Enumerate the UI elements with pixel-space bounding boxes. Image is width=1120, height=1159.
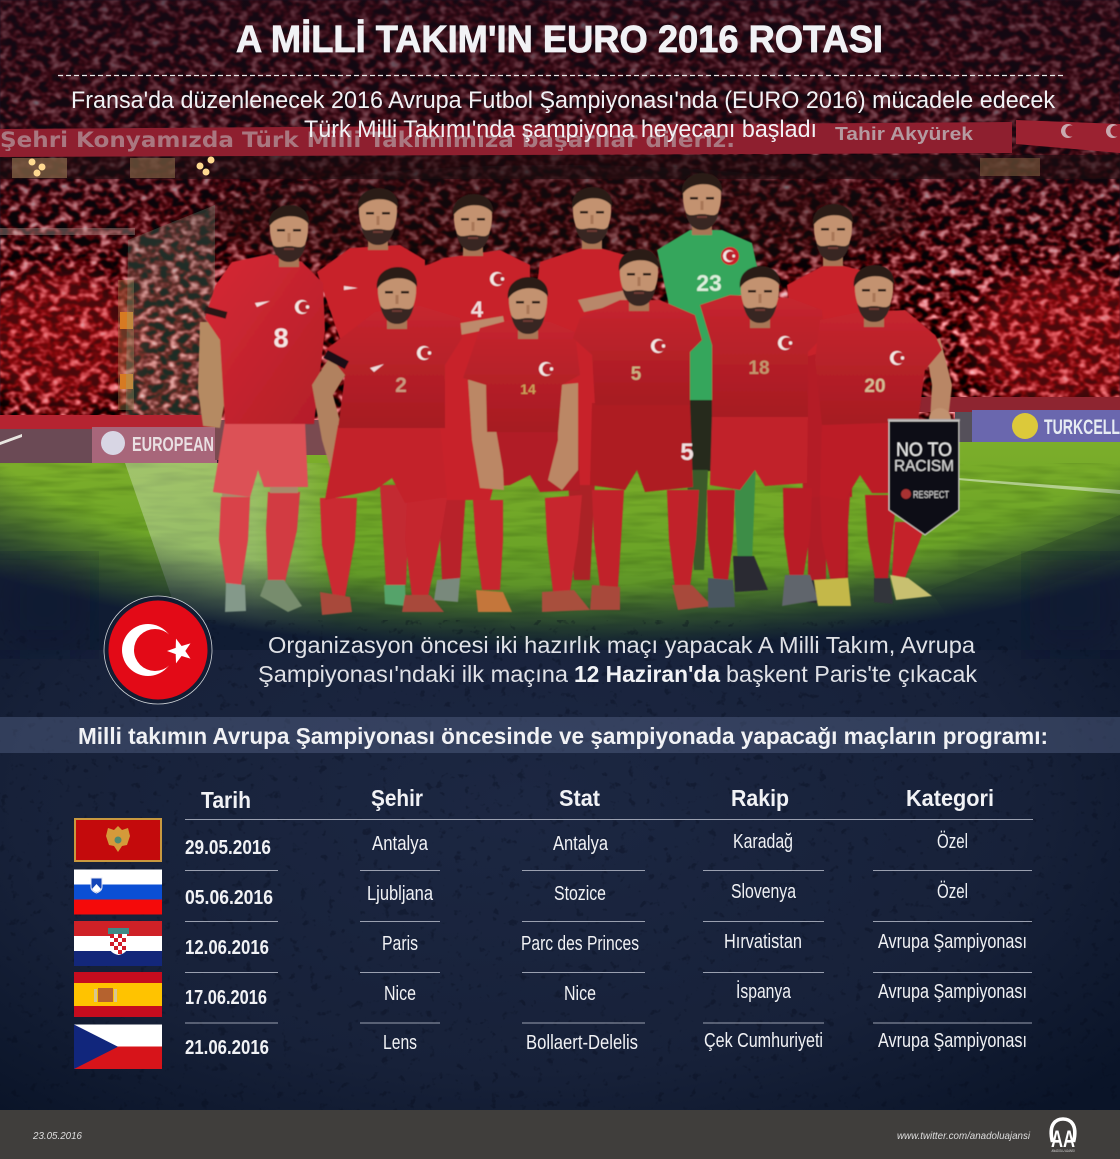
row 4: Spain bbox=[185, 980, 1027, 1009]
player 20: 20 bbox=[864, 376, 886, 397]
subtitle bbox=[71, 87, 1056, 143]
banner in stands: Tahir Akyürek bbox=[835, 124, 974, 144]
football pitch bbox=[0, 442, 1120, 653]
flag: Spain bbox=[74, 972, 162, 1017]
player 14: 14 bbox=[520, 381, 536, 397]
row 5: Czech Republic: Lens bbox=[383, 1032, 417, 1054]
banner in stands bbox=[0, 120, 1120, 157]
row 2: Slovenia: Özel bbox=[937, 881, 968, 903]
player 5: 5 bbox=[680, 439, 694, 466]
advertising boards: EUROPEAN bbox=[132, 434, 214, 456]
subtitle: Fransa'da düzenlenecek 2016 Avrupa Futbol Şampiyonası'nda (EURO 2016) mücadele edecek bbox=[71, 87, 1056, 114]
table header: Kategori bbox=[906, 785, 994, 811]
flag: Croatia bbox=[74, 921, 162, 966]
row 5: Czech Republic: Bollaert-Delelis bbox=[526, 1032, 638, 1054]
flag: Montenegro bbox=[74, 818, 162, 862]
intro paragraph: başkent Paris'te çıkacak bbox=[726, 661, 977, 687]
row 2: Slovenia bbox=[185, 881, 968, 909]
row 4: Spain: Nice bbox=[564, 983, 596, 1005]
flag: Czech Republic bbox=[74, 1024, 162, 1069]
icon: Turkish flag circle bbox=[104, 596, 212, 704]
row 1: Montenegro: Karadağ bbox=[733, 831, 793, 853]
banner in stands: Şehri Konyamızda Türk Milli Takımımıza başarılar dileriz. bbox=[0, 128, 735, 152]
row 5: Czech Republic: Çek Cumhuriyeti bbox=[704, 1030, 823, 1052]
row 4: Spain: Nice bbox=[384, 983, 416, 1005]
player 2 bbox=[312, 267, 505, 615]
pennant: no to racism: RESPECT bbox=[913, 490, 949, 501]
logo: Anadolu Agency: ANADOLU AJANSI bbox=[1052, 1149, 1075, 1153]
row 3: Croatia: Parc des Princes bbox=[521, 933, 639, 955]
stadium crowd background bbox=[0, 0, 1120, 462]
player 5 bbox=[573, 249, 712, 610]
player 2: 2 bbox=[395, 374, 407, 397]
player 8: 8 bbox=[273, 323, 289, 353]
logo: Anadolu Agency bbox=[1051, 1119, 1075, 1153]
table header: Tarih bbox=[201, 787, 251, 813]
intro paragraph: Organizasyon öncesi iki hazırlık maçı yapacak A Milli Takım, Avrupa bbox=[268, 632, 975, 658]
intro paragraph: Şampiyonası'ndaki ilk maçına bbox=[258, 661, 568, 687]
row 2: Slovenia: 05.06.2016 bbox=[185, 887, 273, 909]
date: 23.05.2016 bbox=[32, 1131, 82, 1142]
row 2: Slovenia: Stozice bbox=[554, 883, 606, 905]
player 18: 18 bbox=[748, 358, 770, 379]
twitter url: www.twitter.com/anadoluajansi bbox=[897, 1130, 1031, 1142]
row 3: Croatia bbox=[185, 931, 1027, 959]
player 20 bbox=[814, 265, 952, 606]
player: back row 4 bbox=[420, 194, 530, 602]
row 1: Montenegro: Antalya bbox=[553, 833, 609, 855]
player: back row 5th bbox=[535, 187, 635, 580]
team photo bbox=[198, 173, 960, 615]
table header: Rakip bbox=[731, 785, 789, 811]
player 5: 5 bbox=[631, 364, 642, 385]
logo: Anadolu Agency: AA bbox=[1051, 1126, 1075, 1153]
pennant: no to racism: RACISM bbox=[894, 458, 954, 475]
player 14 bbox=[463, 277, 590, 612]
subtitle: Türk Milli Takımı'nda şampiyona heyecanı başladı bbox=[304, 116, 817, 143]
row 4: Spain: Avrupa Şampiyonası bbox=[878, 981, 1027, 1003]
schedule heading band: Milli takımın Avrupa Şampiyonası öncesinde ve şampiyonada yapacağı maçların programı: bbox=[78, 723, 1048, 749]
player: back row goalkeeper 23 bbox=[657, 173, 768, 592]
row 4: Spain: İspanya bbox=[736, 980, 792, 1003]
row 1: Montenegro: Özel bbox=[937, 831, 968, 853]
match schedule table bbox=[185, 785, 1033, 1059]
player: back row 4: 4 bbox=[471, 297, 484, 322]
table header bbox=[201, 785, 994, 813]
row 2: Slovenia: Slovenya bbox=[731, 881, 797, 903]
table header: Stat bbox=[559, 785, 600, 811]
row 1: Montenegro: 29.05.2016 bbox=[185, 837, 271, 859]
row 5: Czech Republic bbox=[185, 1030, 1027, 1059]
pennant: no to racism bbox=[888, 419, 960, 535]
intro paragraph: 12 Haziran'da bbox=[574, 661, 720, 687]
row 4: Spain: 17.06.2016 bbox=[185, 987, 267, 1009]
player: back row right bbox=[787, 204, 865, 604]
title: A MİLLİ TAKIM'IN EURO 2016 ROTASI bbox=[236, 19, 883, 61]
row 3: Croatia: Paris bbox=[382, 933, 418, 955]
advertising boards bbox=[0, 397, 1120, 463]
table header: Şehir bbox=[371, 785, 423, 811]
row 3: Croatia: Hırvatistan bbox=[724, 931, 802, 953]
flag: Slovenia bbox=[74, 870, 162, 914]
footer bar bbox=[0, 1110, 1120, 1159]
player: back row left 2 bbox=[317, 188, 425, 606]
row 5: Czech Republic: Avrupa Şampiyonası bbox=[878, 1030, 1027, 1052]
player: back row goalkeeper 23: 23 bbox=[696, 270, 722, 296]
dashed divider bbox=[58, 74, 1063, 76]
player 18 bbox=[700, 266, 825, 608]
row 5: Czech Republic: 21.06.2016 bbox=[185, 1037, 269, 1059]
schedule heading band bbox=[0, 717, 1120, 753]
intro paragraph bbox=[258, 632, 977, 687]
row 3: Croatia: Avrupa Şampiyonası bbox=[878, 931, 1027, 953]
row 3: Croatia: 12.06.2016 bbox=[185, 937, 269, 959]
row 1: Montenegro bbox=[185, 831, 968, 859]
table rules bbox=[185, 820, 1033, 1023]
row 2: Slovenia: Ljubljana bbox=[367, 883, 434, 905]
lower navy textured background bbox=[0, 440, 1120, 1110]
player 8 bbox=[198, 205, 325, 612]
pennant: no to racism: NO TO bbox=[896, 440, 952, 461]
light ray over the stands bbox=[125, 205, 215, 462]
row 1: Montenegro: Antalya bbox=[372, 833, 429, 855]
